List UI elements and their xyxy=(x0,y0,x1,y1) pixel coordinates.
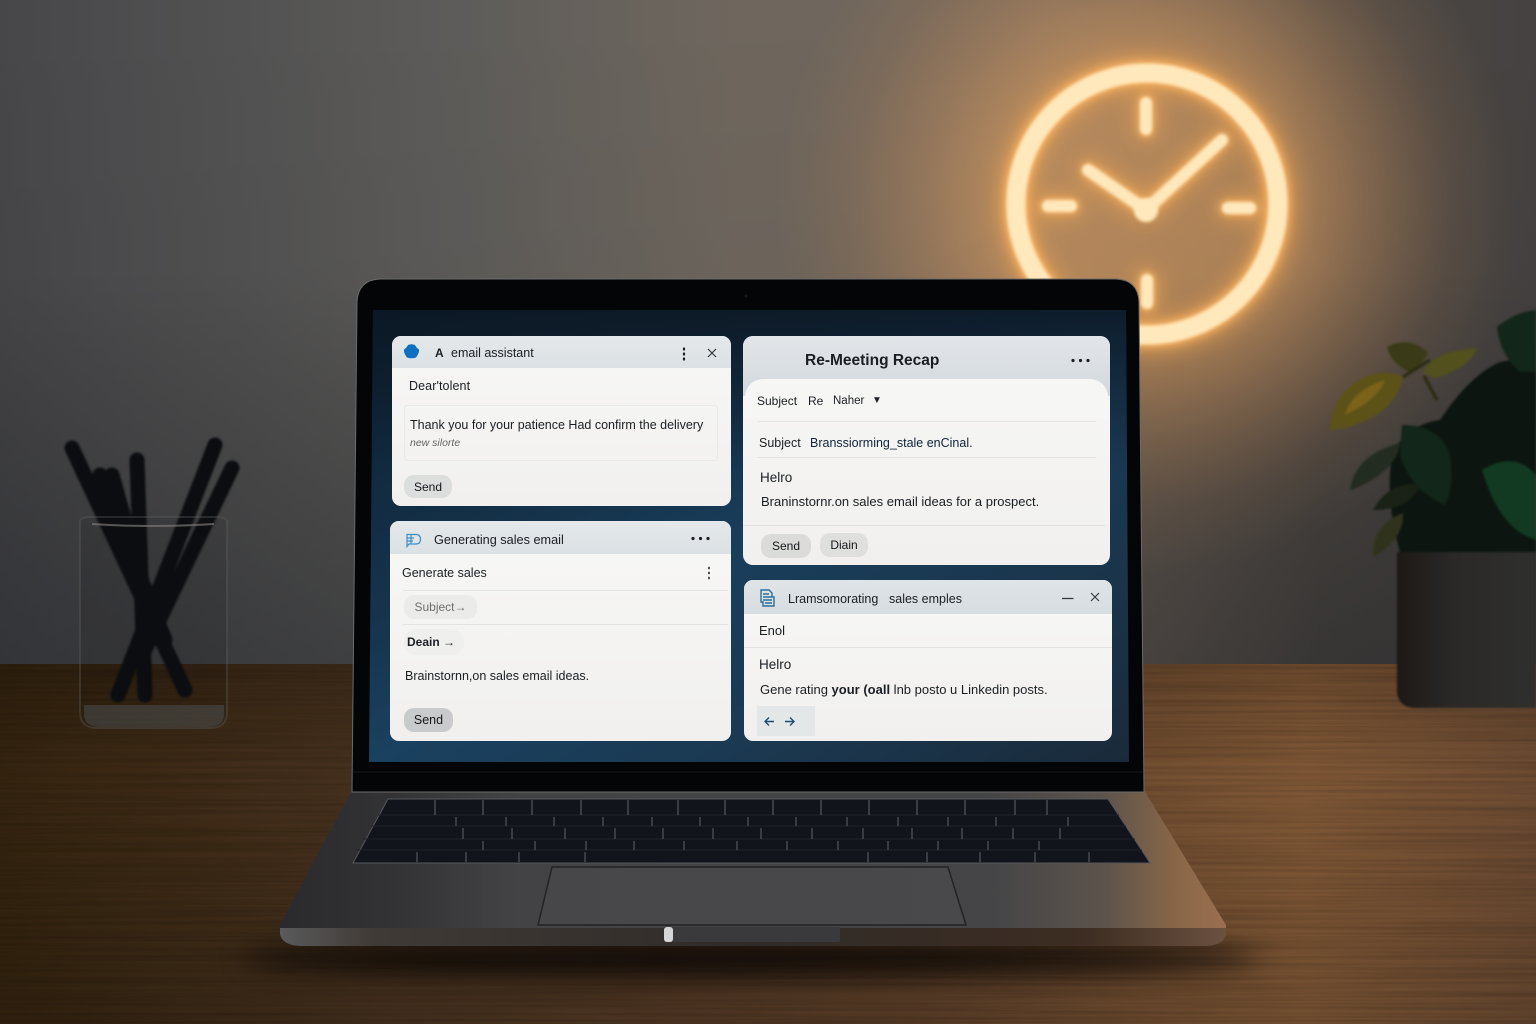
icon: more dots xyxy=(1071,358,1090,362)
panel: generating sales email: Generate sales xyxy=(402,566,487,580)
icon: chat xyxy=(406,534,422,548)
panel header: email assistant xyxy=(451,346,534,360)
panel: brainstorming sales examples: Helro xyxy=(759,657,791,672)
panel: re-meeting recap: Subject xyxy=(757,394,797,408)
laptop lid and screen xyxy=(352,279,1144,792)
panel: re-meeting recap: Naher xyxy=(833,395,864,407)
panel: generating sales email: Deain → xyxy=(407,635,455,649)
panel: generating sales email: Subject→ xyxy=(414,600,467,614)
panel: re-meeting recap xyxy=(743,336,1110,565)
panel: brainstorming sales examples: Gene rating your (oall lnb posto u Linkedin posts. xyxy=(760,682,1048,697)
panel header: sales emples xyxy=(889,592,962,606)
panel: re-meeting recap: ▼ xyxy=(872,395,882,406)
panel: brainstorming sales examples: Enol xyxy=(759,623,785,638)
message box: Thank you for your patience Had confirm the delivery xyxy=(410,418,703,432)
keyboard xyxy=(353,799,1150,863)
panel header xyxy=(744,580,1112,614)
icon: row menu xyxy=(708,566,710,580)
icon: glowing clock xyxy=(1016,73,1278,335)
desk xyxy=(0,664,1536,1024)
icon: close xyxy=(1090,592,1100,602)
panel header xyxy=(392,336,731,368)
panel: re-meeting recap: Branssiorming_stale enCinal. xyxy=(810,436,973,450)
panel header: Generating sales email xyxy=(434,533,564,547)
panel: re-meeting recap: Subject xyxy=(759,436,801,450)
panel header xyxy=(390,521,731,554)
icon: close xyxy=(708,348,716,358)
panel: generating sales email xyxy=(390,521,731,741)
message box xyxy=(404,405,718,461)
panel: email assistant: Dear'tolent xyxy=(409,379,470,393)
panel header xyxy=(743,336,1110,396)
panel: re-meeting recap: Diain xyxy=(830,538,858,552)
icon: pen holder xyxy=(72,445,232,728)
panel: email assistant xyxy=(392,336,731,506)
icon: more dots xyxy=(691,536,710,540)
icon: assistant badge xyxy=(404,344,420,358)
panel header: Re-Meeting Recap xyxy=(805,352,939,369)
panel: re-meeting recap: Send xyxy=(772,539,800,553)
panel: email assistant: Send xyxy=(414,480,442,494)
laptop shadow xyxy=(240,938,1260,978)
message box: new silorte xyxy=(410,437,460,449)
panel: re-meeting recap: Helro xyxy=(760,470,792,485)
panel: re-meeting recap: Re xyxy=(808,394,823,408)
panel: brainstorming sales examples xyxy=(744,580,1112,741)
icon: minimize xyxy=(1062,598,1074,600)
panel: re-meeting recap: Braninstornr.on sales email ideas for a prospect. xyxy=(761,494,1039,509)
navigation arrows xyxy=(757,706,815,736)
icon: more menu xyxy=(682,347,686,361)
panel header: A xyxy=(435,346,444,360)
icon: document xyxy=(760,589,775,607)
trackpad xyxy=(538,867,966,925)
front notch xyxy=(664,927,840,942)
panel: generating sales email: Send xyxy=(414,713,443,727)
laptop base xyxy=(280,790,1226,946)
icon: potted plant xyxy=(1330,310,1536,708)
panel: generating sales email: Brainstornn,on sales email ideas. xyxy=(405,669,589,683)
panel header: Lramsomorating xyxy=(788,592,878,606)
